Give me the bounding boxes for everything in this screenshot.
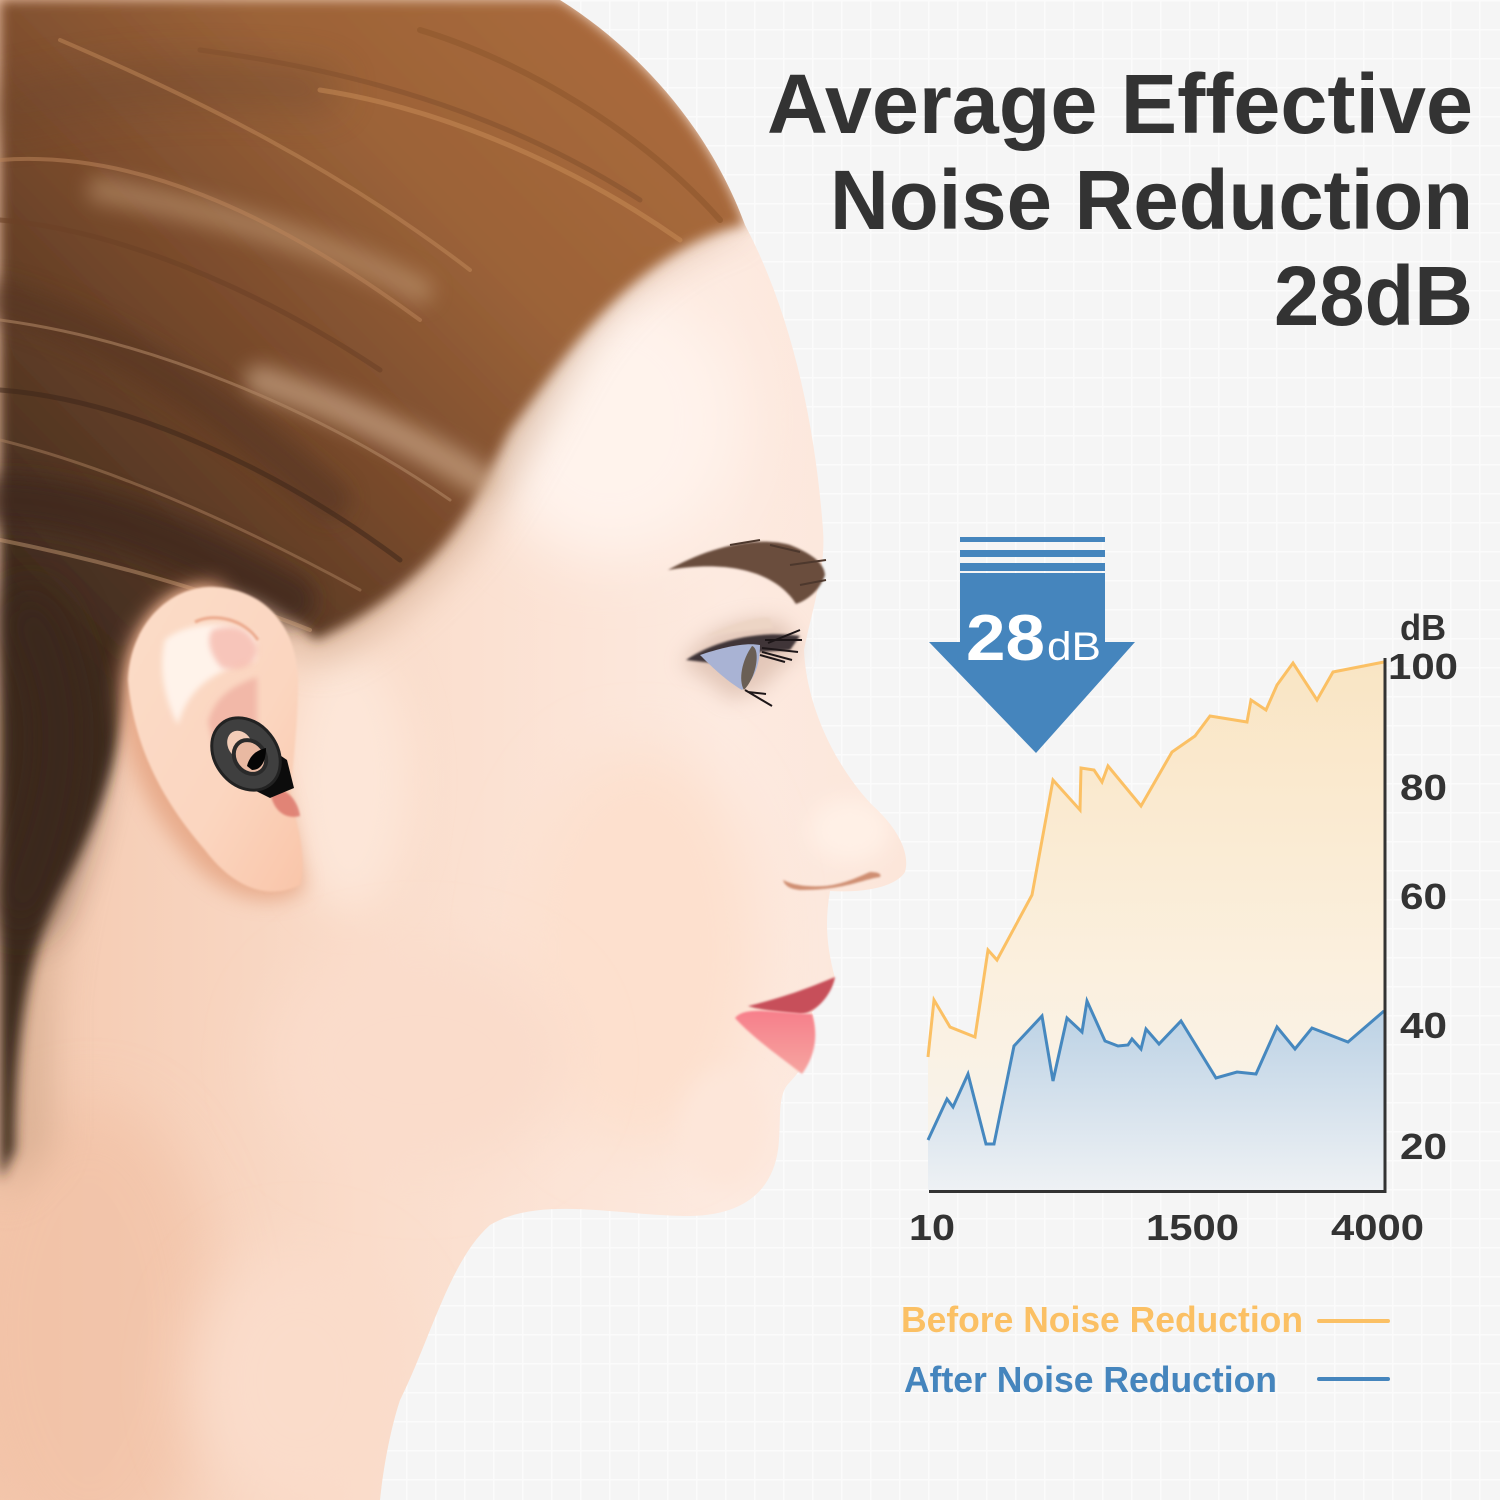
y axis labels: 60 (1400, 876, 1447, 917)
x axis labels: 4000 (1331, 1207, 1424, 1248)
title line 1: Average Effective (767, 57, 1473, 151)
hair (0, 0, 745, 1180)
skin shading (0, 280, 890, 1500)
x axis labels: 1500 (1146, 1207, 1239, 1248)
woman's head in profile (0, 0, 906, 1500)
y axis labels: 40 (1400, 1005, 1447, 1046)
arrow: 28dB reduction (929, 537, 1135, 753)
ear (128, 587, 302, 892)
after line (928, 1001, 1384, 1144)
arrow label: 28 (966, 601, 1045, 674)
ear inner shading (162, 618, 300, 817)
icon: black earbud (196, 703, 296, 805)
arrow shape (929, 537, 1135, 753)
hair glow along the hairline (0, 0, 745, 1200)
before line (928, 662, 1384, 1057)
after area fill (928, 1001, 1384, 1190)
legend: after: After Noise Reduction (904, 1359, 1277, 1400)
title line 2: Noise Reduction (830, 153, 1473, 247)
eyebrow (668, 540, 826, 604)
before area fill (928, 662, 1384, 1190)
y axis labels: 80 (1400, 767, 1447, 808)
hair highlights and strands (0, 30, 720, 900)
legend: before: Before Noise Reduction (901, 1299, 1303, 1340)
noise reduction chart (909, 607, 1458, 1248)
x axis labels: 10 (909, 1207, 955, 1248)
arrow unit: dB (1047, 625, 1101, 669)
eye (682, 618, 802, 706)
face and neck skin (0, 0, 906, 1500)
title line 3: 28dB (1274, 249, 1473, 343)
y axis labels: 20 (1400, 1126, 1447, 1167)
legend (901, 1299, 1390, 1400)
title (767, 57, 1473, 343)
y axis labels: dB (1400, 607, 1446, 648)
nostril (783, 872, 881, 890)
y axis labels: 100 (1388, 646, 1458, 687)
x axis labels (909, 1207, 1424, 1248)
y axis labels (1388, 607, 1458, 1167)
axes (929, 658, 1385, 1192)
ear shadow (120, 582, 305, 900)
lips (735, 977, 835, 1074)
